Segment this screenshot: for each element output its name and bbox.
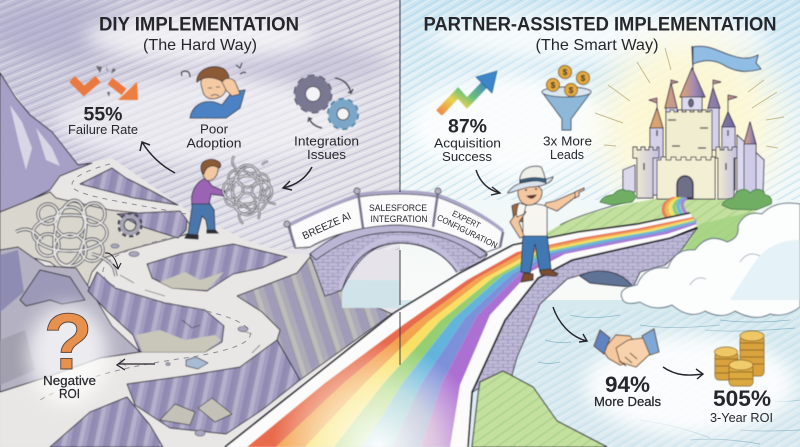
title: DIY implementation: DIY IMPLEMENTATION bbox=[99, 14, 299, 36]
castle with flag bbox=[623, 46, 764, 199]
icon: tangle held by person bbox=[219, 156, 276, 224]
icon: handshake bbox=[594, 329, 659, 367]
stat: 87% acquisition success bbox=[434, 116, 501, 164]
fluffy cloud bbox=[621, 203, 800, 317]
stat: 505% 3-year ROI bbox=[710, 386, 773, 425]
arrow: towards failure rate bbox=[140, 142, 175, 173]
icon: coin stacks bbox=[714, 331, 764, 386]
right panel background: clear sky and sunburst bbox=[400, 0, 800, 300]
stat: 94% more deals bbox=[594, 372, 662, 409]
stat: 87% acquisition success: 87% bbox=[448, 116, 487, 138]
stat: 55% failure rate: 55% bbox=[84, 104, 122, 126]
stat: 94% more deals: 94% bbox=[605, 372, 650, 397]
sign: Expert Configuration: EXPERT bbox=[451, 208, 482, 230]
label: negative ROI: ROI bbox=[59, 387, 80, 401]
small pebbles on road bbox=[111, 244, 248, 436]
icon: gear on road bbox=[119, 214, 141, 236]
icon: funnel with coins: $ bbox=[569, 85, 574, 95]
label: 3x more leads bbox=[543, 134, 592, 162]
grassy knoll in foreground bbox=[472, 371, 607, 447]
label: integration issues: Issues bbox=[307, 147, 347, 162]
icon: frustrated person bbox=[181, 63, 246, 118]
title: Partner-assisted implementation: (The Smart Way) bbox=[536, 37, 658, 54]
label: poor adoption bbox=[186, 122, 242, 150]
keep bbox=[666, 110, 712, 160]
white halo around negative ROI bbox=[28, 305, 108, 405]
page divider line bbox=[399, 0, 401, 365]
person struggling with tangle bbox=[185, 160, 226, 239]
icon: orange question mark: ? bbox=[44, 297, 92, 386]
label: poor adoption: Poor bbox=[200, 122, 229, 136]
stat: 55% failure rate bbox=[68, 104, 138, 137]
label: poor adoption: Adoption bbox=[186, 136, 242, 150]
label: integration issues: Integration bbox=[294, 134, 359, 148]
front wall and gate bbox=[657, 157, 715, 199]
far walls bbox=[623, 135, 764, 195]
label: 3x more leads: Leads bbox=[550, 147, 584, 162]
sign: Breeze AI: BREEZE AI bbox=[301, 210, 353, 242]
stat: 87% acquisition success: Success bbox=[442, 149, 492, 164]
front towers bbox=[633, 147, 659, 198]
sign: Salesforce Integration bbox=[369, 203, 428, 225]
title: Partner-assisted implementation: PARTNER-ASSISTED IMPLEMENTATION bbox=[424, 14, 776, 36]
arrow: handshake to coins bbox=[663, 367, 703, 379]
bushes beside castle bbox=[600, 189, 772, 210]
sun rays behind castle bbox=[595, 48, 784, 148]
title: Partner-assisted implementation bbox=[424, 14, 776, 54]
title: DIY implementation bbox=[99, 14, 299, 54]
flag bbox=[692, 46, 761, 71]
stat: 55% failure rate: Failure Rate bbox=[68, 122, 138, 137]
right bridge stonework and arch bbox=[472, 228, 697, 392]
left bridge with signs bbox=[284, 188, 503, 308]
stat: 505% 3-year ROI: 3-Year ROI bbox=[710, 410, 773, 425]
icon: rainbow growth arrow bbox=[439, 71, 497, 113]
stat: 94% more deals: More Deals bbox=[594, 394, 662, 409]
rainbow path to castle gate bbox=[663, 198, 696, 222]
water on right panel bbox=[400, 300, 800, 447]
sign: Expert Configuration: CONFIGURATION bbox=[435, 212, 499, 250]
label: integration issues bbox=[294, 134, 359, 162]
stat: 87% acquisition success: Acquisition bbox=[434, 136, 501, 150]
left terrain: mountains, winding road and cliffs bbox=[0, 73, 392, 447]
icon: funnel with coins: $ bbox=[581, 73, 586, 83]
title: DIY implementation: (The Hard Way) bbox=[143, 37, 257, 54]
sign: Salesforce Integration: SALESFORCE bbox=[369, 203, 427, 214]
icon: tangle on the road bbox=[16, 198, 116, 276]
label: negative ROI bbox=[43, 374, 96, 401]
sign: Salesforce Integration: INTEGRATION bbox=[370, 214, 428, 225]
label: 3x more leads: 3x More bbox=[543, 134, 592, 148]
icon: funnel with coins: $ bbox=[551, 80, 556, 90]
rear towers bbox=[650, 108, 735, 195]
green hill under castle bbox=[520, 196, 785, 262]
road centre dashes bbox=[40, 164, 250, 400]
icon: funnel with coins: $ bbox=[563, 67, 568, 77]
rainbow bridge deck bbox=[225, 213, 697, 447]
arrow: towards guide bbox=[476, 170, 500, 195]
arrow: from integration issues bbox=[283, 167, 312, 190]
icon: funnel with coins bbox=[542, 66, 591, 130]
stat: 505% 3-year ROI: 505% bbox=[713, 386, 771, 411]
person guide pointing to castle bbox=[508, 166, 584, 282]
arrow: bridge to handshake bbox=[553, 307, 587, 342]
arrow: tangle onto road bbox=[105, 253, 121, 269]
label: negative ROI: Negative bbox=[43, 374, 96, 388]
icon: grey and blue gears bbox=[296, 77, 357, 128]
arrow: road towards negative ROI bbox=[117, 359, 155, 370]
left panel background: stormy sky bbox=[0, 0, 400, 447]
icon: broken orange arrow bbox=[72, 65, 138, 100]
